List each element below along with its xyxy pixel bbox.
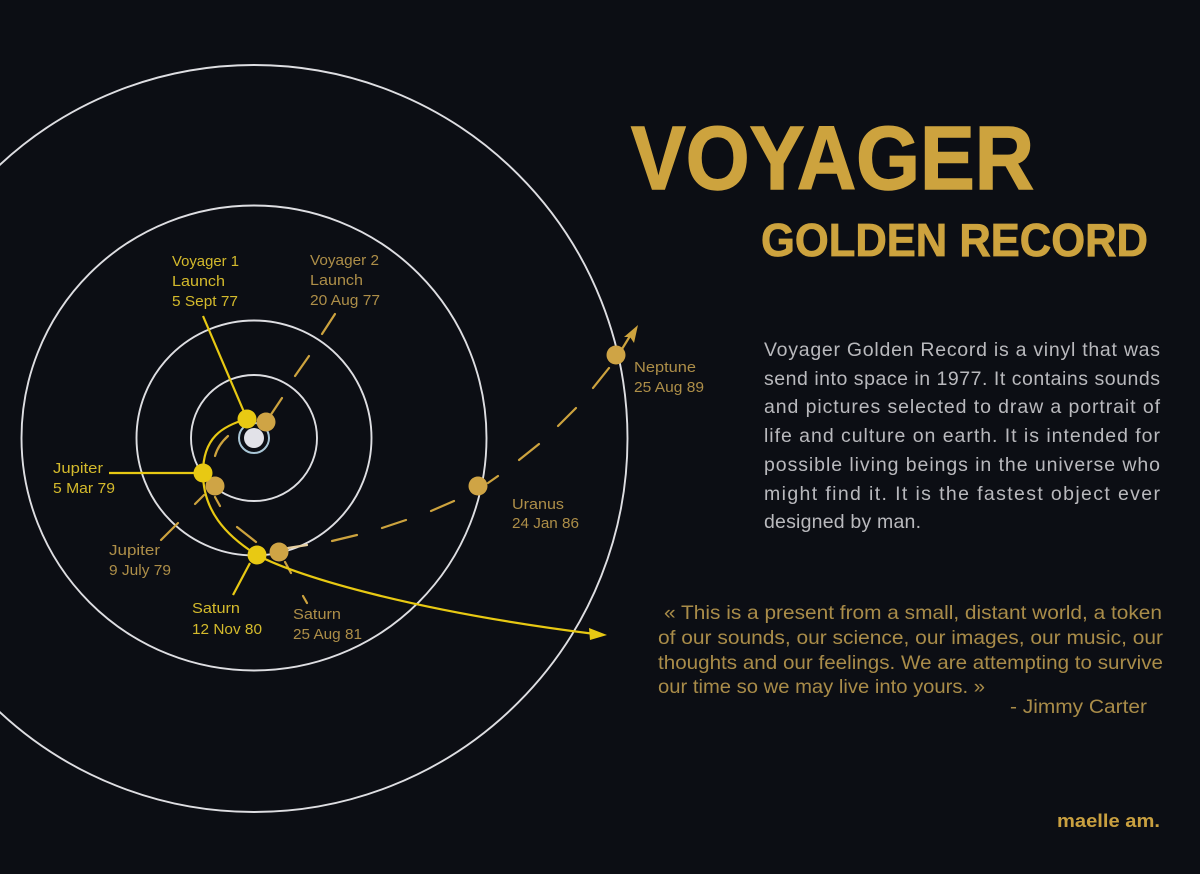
label: Jupiter Voyager 2: 9 July 79	[109, 562, 171, 579]
label: Neptune	[634, 359, 704, 396]
label: Jupiter Voyager 1	[53, 460, 115, 497]
label: Saturn Voyager 1	[192, 600, 262, 638]
label: Voyager 1 launch: 5 Sept 77	[172, 293, 238, 310]
description text block: might find it. It is the fastest object ever	[764, 483, 1160, 505]
label: Uranus	[512, 496, 579, 532]
quote	[658, 602, 1164, 718]
label: Voyager 1 launch: Voyager 1	[172, 253, 239, 270]
label: Saturn Voyager 1: 12 Nov 80	[192, 621, 262, 638]
subtitle: GOLDEN RECORD	[761, 214, 1148, 266]
label: Voyager 1 launch	[172, 253, 239, 310]
label: Jupiter Voyager 2: Jupiter	[109, 542, 160, 559]
Voyager 2 dashed trajectory	[161, 314, 630, 603]
quote: thoughts and our feelings. We are attempting to survive	[658, 652, 1163, 674]
label: Voyager 1 launch: Launch	[172, 273, 225, 290]
Voyager 1 arrowhead	[589, 628, 607, 640]
label: Neptune: Neptune	[634, 359, 696, 376]
Voyager 1 planet markers	[194, 410, 266, 564]
Voyager 1 leader lines	[109, 316, 250, 595]
description text block: life and culture on earth. It is intended for	[764, 425, 1160, 447]
Voyager 1 trajectory	[203, 419, 595, 634]
label: Saturn Voyager 1: Saturn	[192, 600, 240, 617]
label: Jupiter Voyager 1: Jupiter	[53, 460, 103, 477]
description text block: send into space in 1977. It contains sounds	[764, 368, 1160, 390]
label: Voyager 2 launch: Launch	[310, 272, 363, 289]
quote: our time so we may live into yours. »	[658, 676, 985, 698]
description text block: and pictures selected to draw a portrait of	[764, 396, 1161, 418]
sun	[239, 423, 269, 453]
description text block: designed by man.	[764, 511, 921, 533]
label: Saturn Voyager 2: 25 Aug 81	[293, 626, 362, 643]
title: VOYAGER	[631, 109, 1034, 209]
signature: maelle am.	[1057, 811, 1160, 831]
quote: « This is a present from a small, distant world, a token	[664, 602, 1162, 624]
description text block	[764, 339, 1161, 533]
label: Uranus: 24 Jan 86	[512, 515, 579, 532]
label: Saturn Voyager 2	[293, 606, 362, 643]
label: Uranus: Uranus	[512, 496, 564, 513]
label: Saturn Voyager 2: Saturn	[293, 606, 341, 623]
label: Jupiter Voyager 2	[109, 542, 171, 579]
description text block: Voyager Golden Record is a vinyl that was	[764, 339, 1160, 361]
quote: - Jimmy Carter	[1010, 696, 1148, 718]
label: Neptune: 25 Aug 89	[634, 379, 704, 396]
label: Voyager 2 launch: 20 Aug 77	[310, 292, 380, 309]
label: Voyager 2 launch: Voyager 2	[310, 252, 379, 269]
quote: of our sounds, our science, our images, our music, our	[658, 627, 1164, 649]
description text block: possible living beings in the universe who	[764, 454, 1160, 476]
label: Jupiter Voyager 1: 5 Mar 79	[53, 480, 115, 497]
Voyager 2 arrowhead	[624, 325, 638, 343]
label: Voyager 2 launch	[310, 252, 380, 309]
orbit diagram	[0, 65, 704, 812]
planetary orbits	[0, 65, 628, 812]
Voyager 2 planet markers	[206, 346, 626, 562]
